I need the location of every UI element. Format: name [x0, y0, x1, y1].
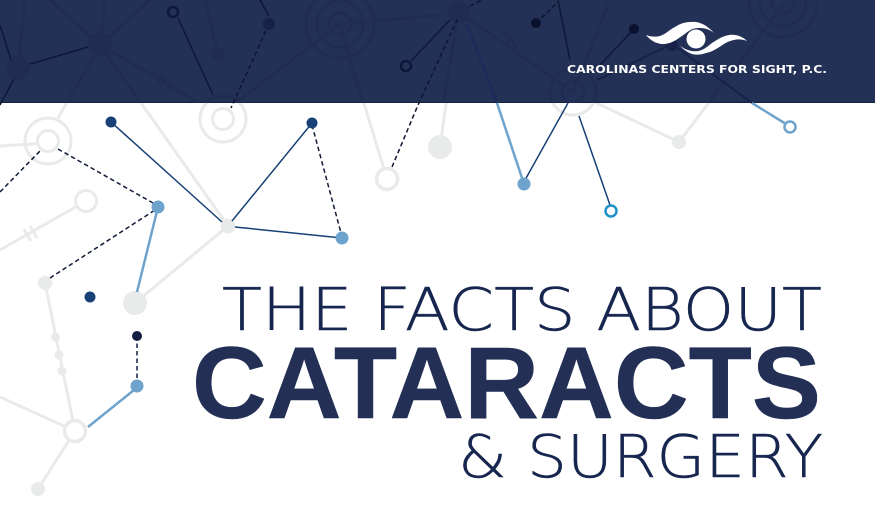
- header network: tone-on-tone nodes and lines: [66, 102, 711, 103]
- connector lines and nodes: lower left cluster: [84, 292, 144, 427]
- logo: eye mark: [646, 22, 747, 55]
- title line 1: THE FACTS ABOUT: [222, 275, 822, 344]
- title line 3: & SURGERY: [458, 422, 823, 491]
- header dark connector lines and nodes: [0, 0, 752, 167]
- title: [192, 275, 823, 491]
- connector lines and nodes: top left cluster: [0, 116, 348, 292]
- company name: CAROLINAS CENTERS FOR SIGHT, P.C.: [567, 64, 827, 76]
- header band: [0, 0, 875, 103]
- title line 2: CATARACTS: [192, 326, 821, 440]
- header bottom edge: [0, 102, 875, 103]
- connector lines and nodes: upper right cluster: [497, 103, 796, 216]
